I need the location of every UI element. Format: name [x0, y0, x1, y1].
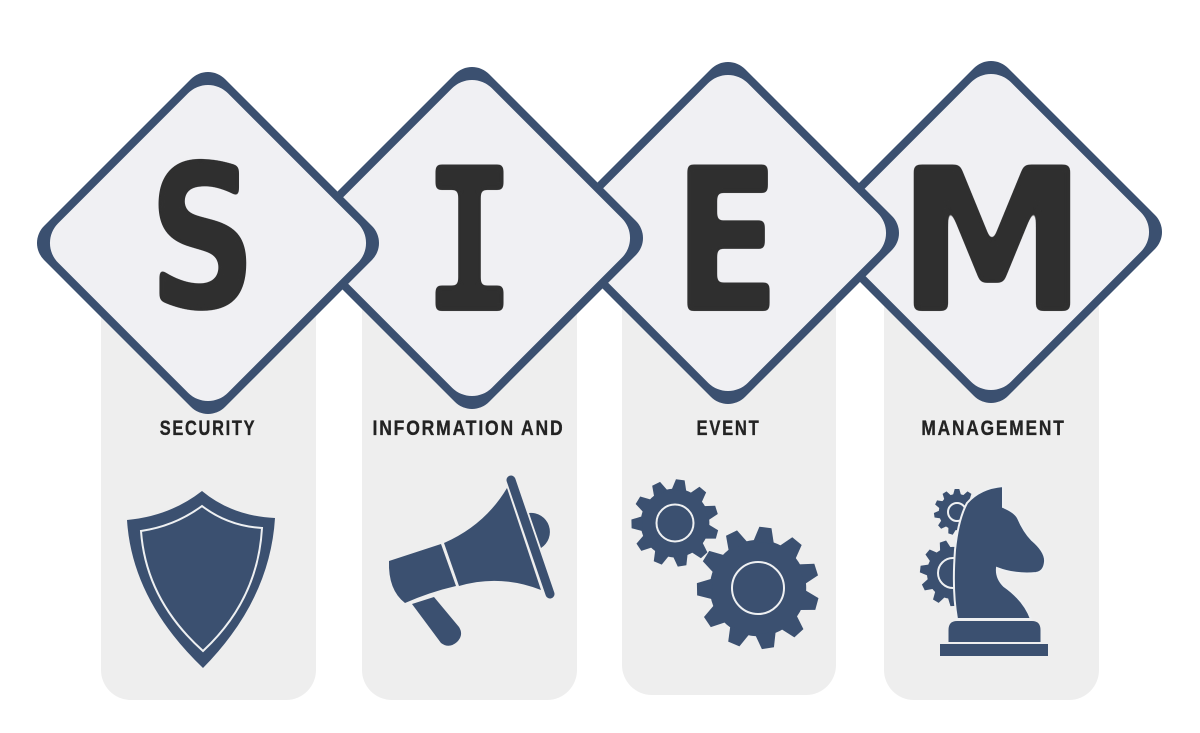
panel: security column [101, 280, 316, 700]
panel: event column [622, 280, 836, 695]
icon: megaphone [389, 480, 550, 646]
icon: gears [626, 474, 827, 657]
label: security: SECURITY [160, 416, 256, 439]
letter I: I [422, 125, 517, 359]
large gear [689, 520, 827, 657]
label: event: EVENT [697, 417, 760, 441]
label: management: MANAGEMENT [921, 418, 1066, 440]
icon: chess knight with gears [912, 486, 1048, 656]
letter E: E [673, 125, 781, 359]
letter M: M [896, 125, 1088, 359]
small gear [626, 474, 724, 572]
diamond: I [291, 57, 653, 419]
diamond: M [810, 51, 1172, 413]
diamond: S [27, 62, 389, 424]
icon: shield [127, 491, 275, 668]
letter S: S [147, 122, 258, 356]
label: information and: INFORMATION AND [372, 417, 565, 440]
panel: management column [884, 280, 1099, 700]
panel: information column [362, 280, 577, 700]
diamond: E [547, 52, 909, 414]
